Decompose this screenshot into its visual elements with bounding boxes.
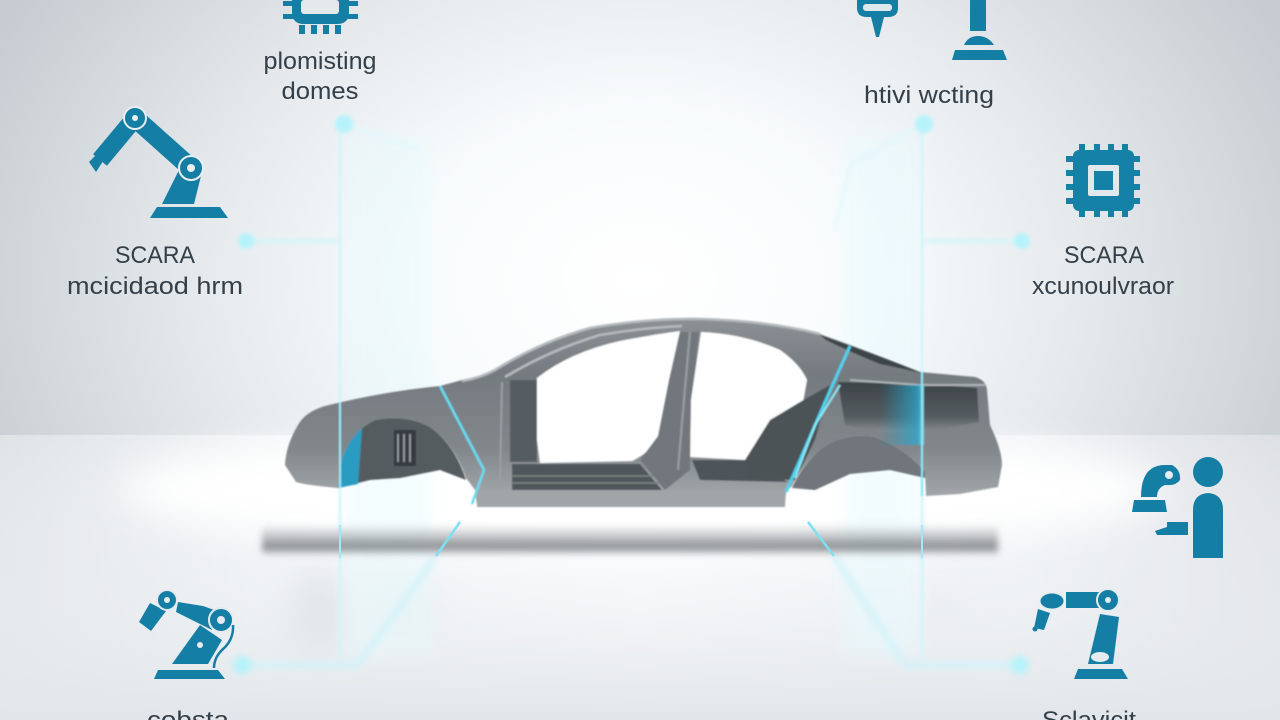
background wall <box>0 0 1280 436</box>
floor <box>0 430 1280 720</box>
body panel <box>285 318 1002 506</box>
rear window opening <box>690 332 807 460</box>
lower door frames <box>512 464 662 490</box>
icon: suction tool top <box>952 0 1007 60</box>
icon: chip right <box>1066 144 1140 217</box>
label: SCARA left <box>67 242 243 300</box>
car body shell <box>285 318 1002 507</box>
rear deck dark edge <box>820 335 922 373</box>
icon: robot arm bottom right <box>1032 589 1128 679</box>
rear quarter dark panel <box>838 382 979 432</box>
icon: chip top left <box>283 0 358 34</box>
blue glow rear <box>880 385 924 445</box>
icon: articulated robot bottom left <box>139 590 233 679</box>
label: plomisting domes: domes <box>282 78 358 105</box>
label: plomisting domes: plomisting <box>264 48 376 75</box>
car ground shadow <box>262 522 998 558</box>
seat contour <box>745 385 830 480</box>
rear wheel arch panel <box>792 436 925 490</box>
blue light streaks <box>340 346 922 504</box>
front wheel arch interior <box>338 418 466 488</box>
floor reflection of car <box>298 575 955 645</box>
front window opening <box>537 331 680 463</box>
B pillar shading <box>640 332 699 490</box>
label: plomisting domes <box>264 48 376 105</box>
label: SCARA right: xcunoulvraor <box>1032 273 1174 300</box>
label: SCARA right: SCARA <box>1064 242 1144 269</box>
label: SCARA left: SCARA <box>115 242 195 269</box>
label: htivi wcting: htivi wcting <box>864 82 994 109</box>
icon: human and robot collaboration <box>1132 457 1223 558</box>
icon: SCARA arm left <box>89 107 228 218</box>
holographic connector panels <box>233 115 1030 674</box>
door sill <box>477 490 785 507</box>
icon: key gripper top <box>857 0 898 37</box>
roof highlight <box>462 319 820 381</box>
label: SCARA right <box>1032 242 1174 300</box>
front pillar <box>510 380 537 462</box>
label: SCARA left: mcicidaod hrm <box>67 273 243 300</box>
